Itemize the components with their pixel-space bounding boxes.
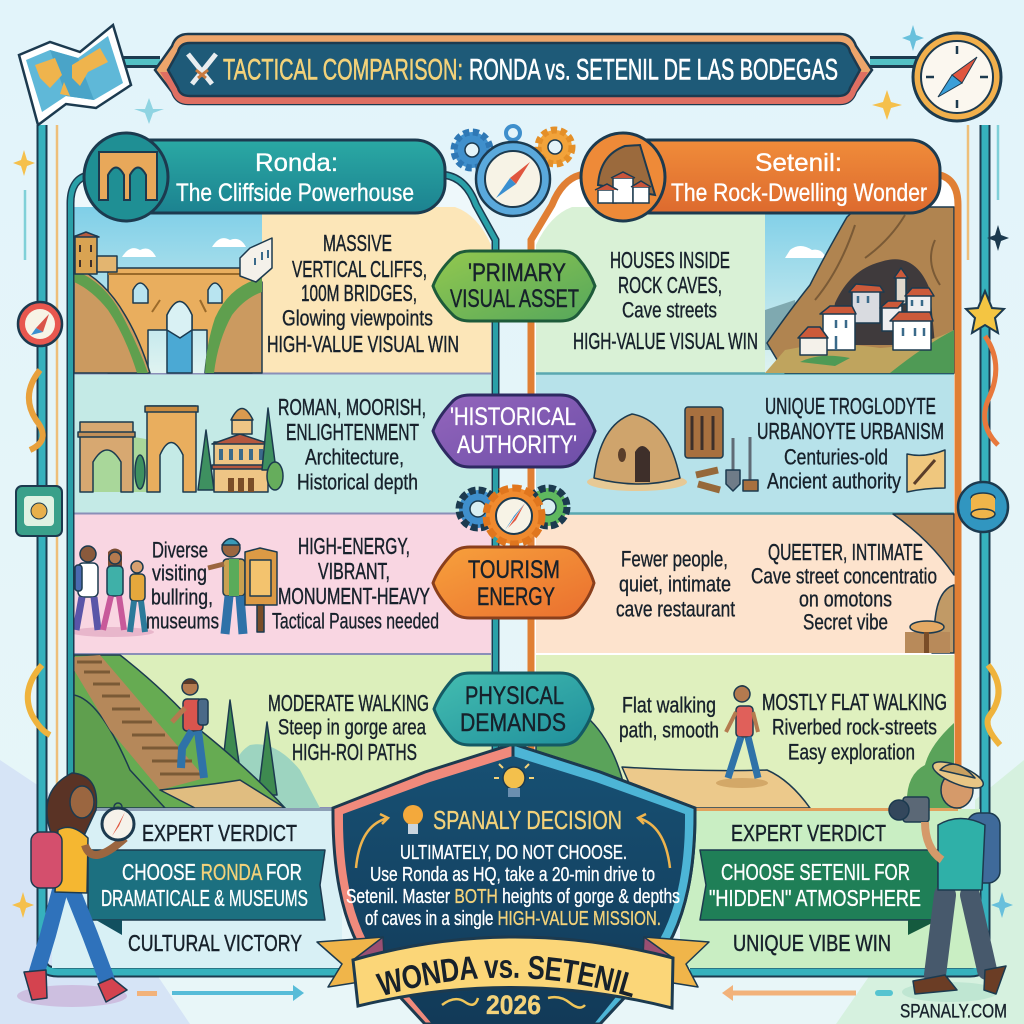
row 4 Setenil text: Flat walking bbox=[622, 692, 716, 718]
decision body text: of caves in a single HIGH-VALUE MISSION. bbox=[365, 908, 661, 930]
ground bbox=[765, 330, 954, 373]
arrow: right rising bbox=[638, 814, 670, 868]
icon: rock with houses bbox=[595, 145, 655, 203]
row 3 Setenil text: cave restaurant bbox=[616, 596, 735, 622]
icon: handheld compass bbox=[102, 803, 134, 840]
row 1 Setenil text: Cave streets bbox=[622, 298, 717, 322]
banner: Wonda vs. Setenil 2026: 2026 bbox=[486, 990, 541, 1020]
row 3 Ronda text: bullring, bbox=[151, 584, 213, 610]
row 4 Setenil text: path, smooth bbox=[619, 718, 719, 742]
row 2 background bbox=[536, 374, 954, 513]
character: photographer bbox=[889, 757, 1006, 1002]
illustration: hiker on stairs bbox=[74, 655, 320, 808]
row 4 Setenil text bbox=[619, 689, 947, 764]
icon: crossed swords bbox=[188, 54, 216, 84]
pill: physical demands: DEMANDS bbox=[460, 709, 566, 737]
cave mouth bbox=[828, 259, 935, 345]
row 4 background bbox=[74, 655, 491, 808]
row 4 Ronda text bbox=[268, 690, 429, 765]
row 4 background bbox=[536, 655, 954, 808]
row 3 Setenil text: Cave street concentratio bbox=[751, 564, 937, 588]
decision body text: ULTIMATELY, DO NOT CHOOSE. bbox=[400, 842, 627, 864]
houses bbox=[240, 238, 272, 282]
row 1 text background bbox=[262, 207, 491, 373]
panel: Ronda verdict bbox=[52, 808, 342, 968]
row 2 Setenil text: UNIQUE TROGLODYTE bbox=[765, 393, 936, 419]
arrow: left rising bbox=[356, 814, 388, 868]
pill: Setenil heading: The Rock-Dwelling Wonder bbox=[671, 179, 927, 207]
row 4 Ronda text: HIGH-ROI PATHS bbox=[292, 739, 417, 765]
clouds bbox=[122, 238, 246, 257]
illustration: Ronda bridge and cliffs bbox=[73, 207, 272, 373]
row 2 Ronda text: ENLIGHTENMENT bbox=[286, 419, 419, 445]
row 3 Ronda text: Tactical Pauses needed bbox=[272, 608, 439, 634]
pill: Setenil heading: Setenil: bbox=[755, 149, 842, 177]
pill: primary visual asset: 'PRIMARY bbox=[468, 259, 566, 287]
banner: Wonda vs. Setenil 2026: WONDA vs. SETENIL bbox=[375, 956, 633, 998]
arrow: bottom right bbox=[722, 985, 893, 1001]
row 4 Setenil text: Easy exploration bbox=[788, 740, 915, 764]
row 2 Setenil text: Ancient authority bbox=[767, 468, 901, 494]
row 2 Setenil text bbox=[757, 393, 944, 494]
rock bbox=[767, 207, 954, 373]
row 1 Ronda text: 100M BRIDGES, bbox=[301, 280, 417, 306]
row 4 Ronda text: MODERATE WALKING bbox=[268, 690, 429, 716]
arrow: bottom left bbox=[137, 985, 304, 1001]
row 3 Ronda text: HIGH-ENERGY, bbox=[298, 533, 410, 559]
panel: Ronda column bbox=[70, 175, 495, 808]
row 3 Setenil text: QUEETER, INTIMATE bbox=[768, 539, 923, 565]
row 3 Ronda text: visiting bbox=[152, 560, 207, 586]
row 4 Setenil text: MOSTLY FLAT WALKING bbox=[762, 689, 947, 715]
row 1 Ronda text: Glowing viewpoints bbox=[282, 306, 433, 330]
row 3 Ronda text: Diverse bbox=[152, 538, 208, 562]
row 3 Setenil text: Fewer people, bbox=[621, 546, 728, 572]
decision body text: Setenil. Master BOTH heights of gorge & depths bbox=[346, 886, 680, 908]
caption: unique vibe win: UNIQUE VIBE WIN bbox=[733, 930, 891, 956]
panel: Setenil column bbox=[531, 175, 958, 808]
pill: Ronda heading: The Cliffside Powerhouse bbox=[176, 179, 414, 207]
row 1 text background bbox=[536, 207, 765, 373]
decision body text bbox=[346, 842, 680, 930]
row 1 Ronda text: VERTICAL CLIFFS, bbox=[292, 256, 427, 282]
row 1 Ronda text: MASSIVE bbox=[323, 230, 392, 256]
shield: Spanaly decision bbox=[316, 746, 710, 1024]
heading: expert verdict right: EXPERT VERDICT bbox=[731, 820, 886, 846]
banner: Wonda vs. Setenil 2026 bbox=[316, 936, 710, 1020]
pill: historical authority: 'HISTORICAL bbox=[450, 403, 576, 431]
row 3 Setenil text: on omotons bbox=[799, 586, 892, 612]
row 3 Ronda text: VIBRANT, bbox=[318, 558, 390, 584]
pill: primary visual asset: VISUAL ASSET bbox=[450, 285, 579, 313]
pill: physical demands bbox=[434, 673, 593, 745]
row dividers bbox=[536, 374, 954, 514]
panel: Setenil verdict bbox=[680, 808, 980, 968]
houses bbox=[852, 290, 880, 323]
left cliff bbox=[74, 266, 150, 373]
title banner: RONDA vs. SETENIL DE LAS BODEGAS bbox=[469, 54, 838, 86]
bridge bbox=[108, 268, 252, 373]
pill: tourism energy: ENERGY bbox=[477, 583, 555, 611]
illustration: flat path walker bbox=[536, 685, 954, 808]
illustration: tourists group bbox=[70, 538, 245, 637]
ribbon: right yellow swirl bbox=[988, 665, 1000, 745]
row dividers bbox=[74, 374, 491, 808]
title banner bbox=[155, 34, 872, 104]
row 3 background bbox=[74, 514, 491, 653]
icon: camera bbox=[889, 797, 929, 822]
row 2 Ronda text: Architecture, bbox=[305, 444, 404, 470]
ribbon: choose Setenil: "HIDDEN" ATMOSPHERE bbox=[709, 885, 921, 911]
illustration: Setenil cave houses bbox=[765, 207, 954, 373]
pill: tourism energy bbox=[433, 547, 594, 618]
ribbon: choose Setenil bbox=[700, 850, 938, 935]
pill: Setenil heading bbox=[581, 133, 940, 221]
icon: folded map bbox=[19, 25, 131, 125]
row 1 Ronda text bbox=[267, 230, 459, 357]
row 2 Setenil text: Centuries-old bbox=[784, 444, 888, 470]
column borders bbox=[70, 175, 958, 812]
row 3 Ronda text bbox=[146, 533, 439, 634]
icon: Ronda arches bbox=[99, 152, 157, 200]
ribbon: choose Setenil: CHOOSE SETENIL FOR bbox=[721, 859, 910, 885]
ribbon: left orange swirl bbox=[29, 370, 43, 450]
row 2 Ronda text bbox=[278, 394, 426, 494]
row 3 Setenil text bbox=[616, 539, 937, 634]
icon: right star bbox=[966, 291, 1004, 333]
pill: primary visual asset bbox=[433, 251, 595, 321]
decision body text: Use Ronda as HQ, take a 20-min drive to bbox=[370, 864, 655, 886]
row 2 Ronda text: Historical depth bbox=[297, 470, 418, 494]
character: woman with compass bbox=[17, 773, 134, 1007]
ribbon: left yellow swirl bbox=[28, 665, 50, 735]
row 1 Setenil text: HIGH-VALUE VISUAL WIN bbox=[573, 328, 758, 354]
row 1 Setenil text: HOUSES INSIDE bbox=[610, 247, 730, 273]
row 2 Setenil text: URBANOYTE URBANISM bbox=[757, 418, 944, 444]
row 3 Setenil text: Secret vibe bbox=[803, 610, 888, 634]
ribbon: choose Ronda: DRAMATICALE & MUSEUMS bbox=[101, 885, 308, 911]
pill: Ronda heading: Ronda: bbox=[255, 149, 338, 177]
ribbon: choose Ronda bbox=[88, 850, 325, 935]
icon: top lightbulb bbox=[494, 764, 534, 797]
row 3 background bbox=[536, 514, 954, 653]
right cliff bbox=[205, 282, 262, 373]
pill: physical demands: PHYSICAL bbox=[465, 682, 564, 710]
row 1 Setenil text: ROCK CAVES, bbox=[618, 272, 722, 298]
ribbon: right orange swirl bbox=[985, 336, 998, 445]
tower bbox=[75, 236, 97, 274]
heading: Spanaly Decision: SPANALY DECISION bbox=[433, 805, 622, 835]
row 2 background bbox=[74, 374, 491, 513]
row 4 Ronda text: Steep in gorge area bbox=[278, 714, 427, 740]
icon: left edge compass bbox=[18, 302, 62, 346]
icon: right coins badge bbox=[958, 482, 1008, 532]
icon: information signboard bbox=[245, 548, 277, 632]
palace bbox=[214, 442, 268, 492]
pill: historical authority bbox=[433, 395, 595, 467]
caption: cultural victory: CULTURAL VICTORY bbox=[128, 930, 302, 956]
row 2 Ronda text: ROMAN, MOORISH, bbox=[278, 394, 426, 420]
pill: tourism energy: TOURISM bbox=[468, 556, 560, 584]
pill: historical authority: AUTHORITY' bbox=[457, 431, 577, 459]
row 1 Setenil text bbox=[573, 247, 758, 354]
icon: top-right compass bbox=[913, 33, 1001, 121]
gears and compass: center bbox=[459, 488, 567, 544]
pill: Ronda heading bbox=[84, 133, 445, 221]
heading: expert verdict: EXPERT VERDICT bbox=[142, 820, 297, 846]
title text: TACTICAL COMPARISON: bbox=[223, 54, 463, 86]
row 3 Ronda text: MONUMENT-HEAVY bbox=[278, 583, 430, 609]
icon: title lightbulb bbox=[403, 805, 423, 834]
icon: parchment scroll bbox=[907, 450, 945, 492]
illustration: Roman arches and palace bbox=[78, 406, 283, 492]
illustration: cave restaurant rock bbox=[893, 514, 954, 653]
illustration: troglodyte hut and tools bbox=[587, 407, 758, 491]
row 3 Setenil text: quiet, intimate bbox=[619, 572, 731, 596]
row 4 Setenil text: Riverbed rock-streets bbox=[772, 714, 937, 740]
row 3 Ronda text: museums bbox=[146, 608, 219, 634]
icon: center compass with gears bbox=[454, 126, 572, 216]
icon: left badge bbox=[16, 486, 62, 536]
ribbon: choose Ronda: CHOOSE RONDA FOR bbox=[122, 859, 302, 885]
row 1 Ronda text: HIGH-VALUE VISUAL WIN bbox=[267, 331, 459, 357]
